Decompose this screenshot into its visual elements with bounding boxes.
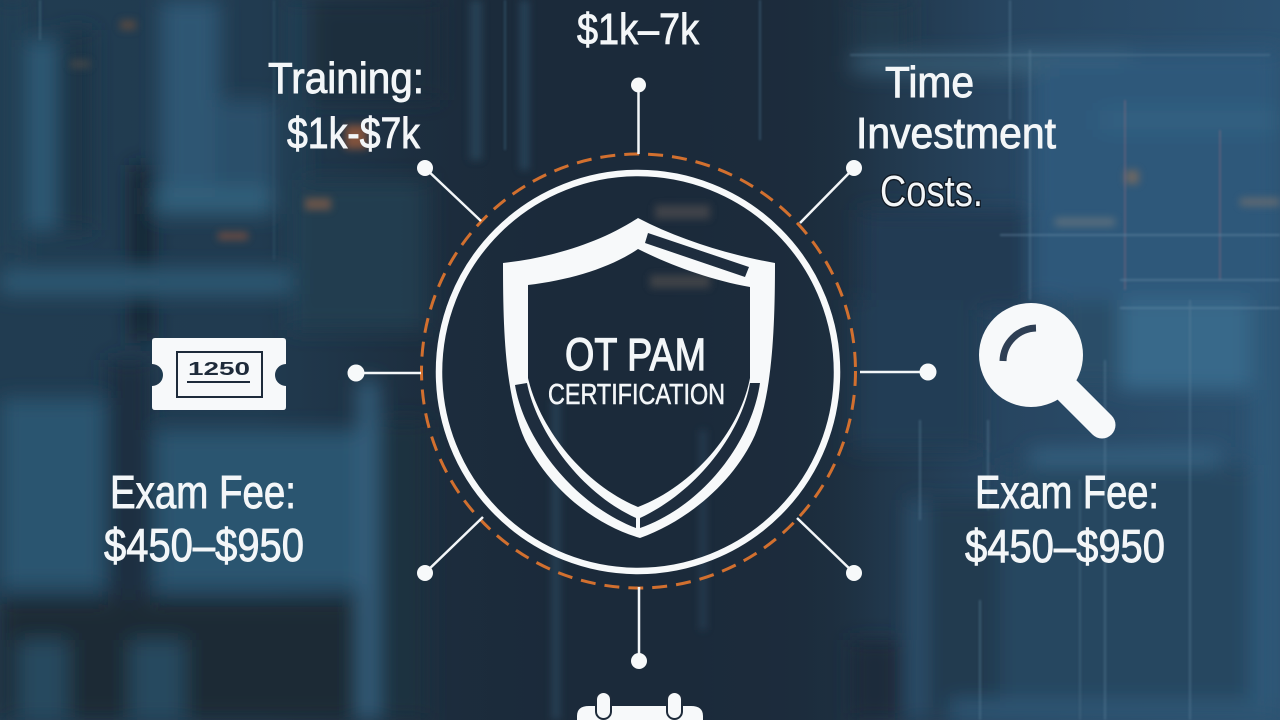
shield subtitle: CERTIFICATION bbox=[548, 379, 725, 411]
connector: left bbox=[348, 364, 421, 382]
label: exam fee left: $450–$950 bbox=[104, 519, 304, 571]
label: time investment costs bbox=[856, 58, 1056, 216]
label: exam fee left bbox=[104, 466, 304, 571]
label: training: $1k-$7k bbox=[287, 109, 421, 158]
label: time investment costs: Investment bbox=[856, 109, 1056, 158]
shield title: OT PAM bbox=[565, 329, 706, 380]
shield emblem bbox=[503, 218, 775, 538]
label: time investment costs: Time bbox=[885, 58, 974, 107]
connector: bottom right bbox=[797, 518, 862, 581]
label: exam fee left: Exam Fee: bbox=[110, 466, 296, 518]
dark centre vignette bbox=[400, 0, 880, 720]
label: top value: $1k–7k bbox=[577, 5, 700, 54]
icon: ticket bbox=[152, 338, 286, 410]
right bottom bbox=[850, 300, 980, 450]
connector: right bbox=[860, 364, 936, 380]
label: training bbox=[268, 54, 424, 158]
icon: calendar bbox=[577, 692, 703, 720]
label: exam fee right: Exam Fee: bbox=[975, 466, 1159, 518]
connector: top left bbox=[417, 160, 481, 221]
right top bbox=[1030, 50, 1280, 300]
white ring bbox=[439, 173, 837, 571]
label: time investment costs: Costs. bbox=[880, 167, 983, 216]
connector: bottom left bbox=[417, 517, 483, 581]
label: exam fee right: $450–$950 bbox=[965, 520, 1165, 572]
connector: top bbox=[631, 78, 646, 154]
left bottom bbox=[0, 398, 105, 588]
connector: top right bbox=[800, 160, 862, 223]
icon: magnifying glass bbox=[979, 303, 1102, 425]
icon: ticket: 1250 bbox=[188, 359, 250, 379]
label: training: Training: bbox=[268, 54, 424, 103]
left top bbox=[28, 40, 56, 230]
label: exam fee right bbox=[965, 466, 1165, 572]
connector: bottom bbox=[631, 587, 647, 669]
dashed orange ring bbox=[422, 154, 856, 588]
